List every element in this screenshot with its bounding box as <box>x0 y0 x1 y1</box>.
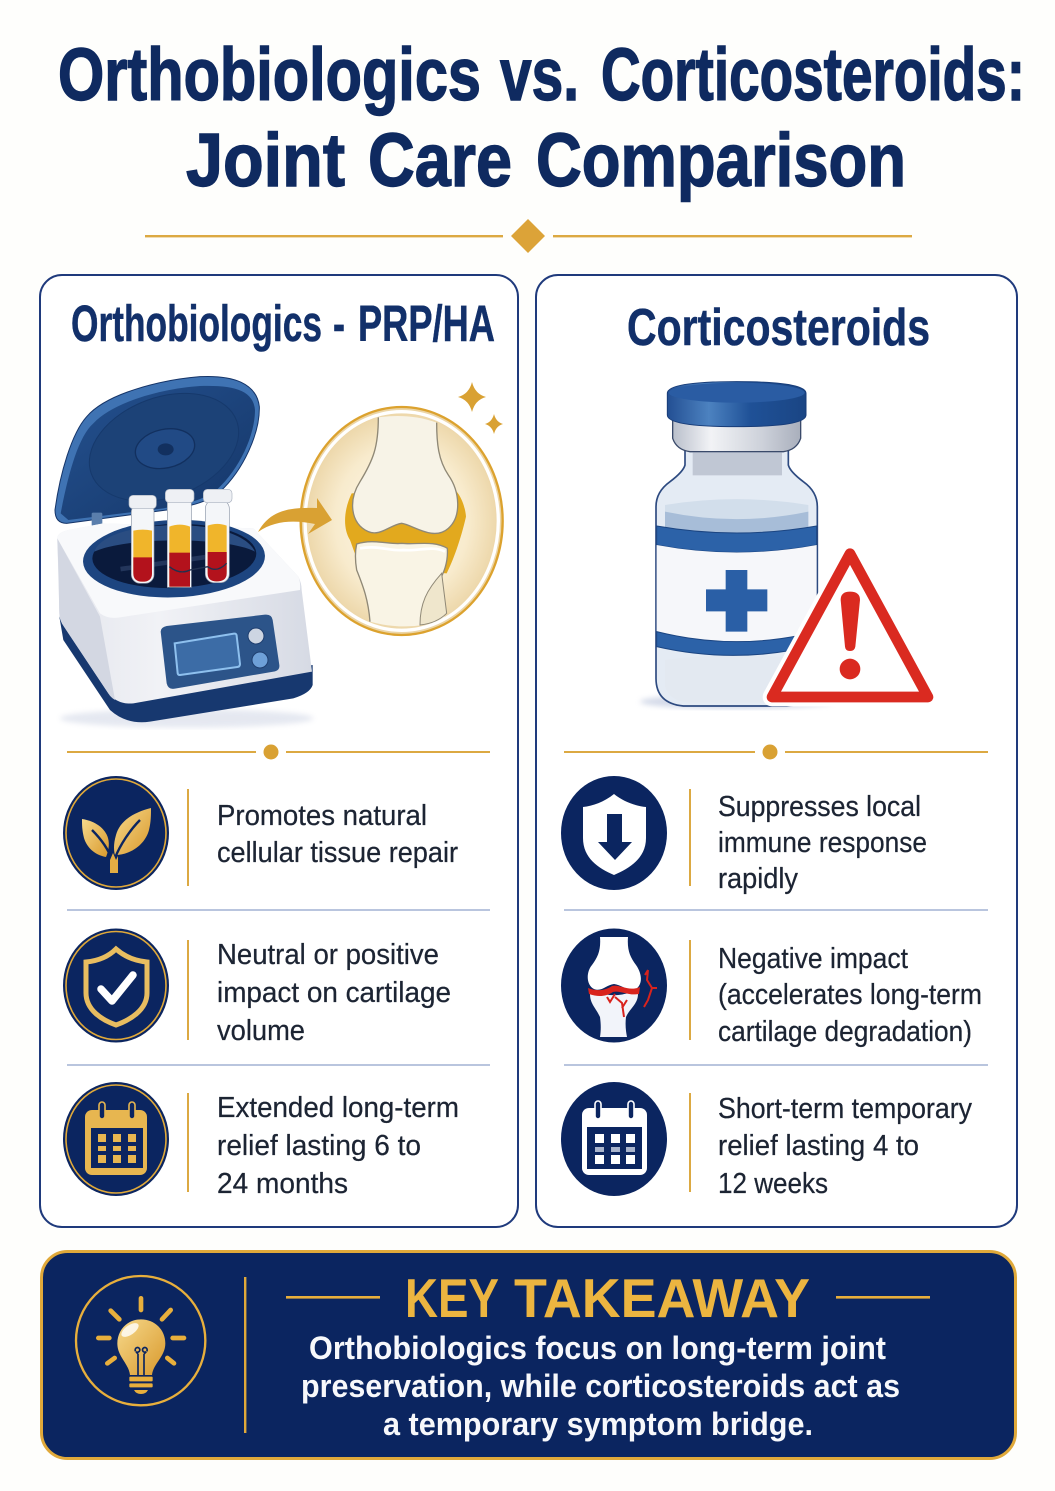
text: immune response: rapidly <box>718 863 798 895</box>
base band <box>59 617 313 722</box>
heading: key takeaway <box>286 1267 930 1329</box>
text: relief duration <box>217 1092 459 1200</box>
icon: gold calendar <box>63 1082 169 1196</box>
heading: corticosteroids: Corticosteroids <box>627 299 930 357</box>
title <box>58 33 1025 202</box>
femur <box>353 416 458 533</box>
illustration: centrifuge with tubes <box>55 374 313 728</box>
title: Joint <box>186 118 345 202</box>
tibia <box>355 542 447 626</box>
icon: white calendar <box>561 1082 667 1196</box>
text: short relief: relief lasting 4 to <box>718 1130 919 1162</box>
text: cellular repair: cellular tissue repair <box>217 837 458 869</box>
illustration: vial <box>640 382 833 709</box>
text: takeaway message <box>301 1330 900 1442</box>
rotor well <box>82 517 266 600</box>
separator <box>689 1093 691 1192</box>
sparkles <box>458 382 503 434</box>
icon: shield check <box>63 928 169 1042</box>
separator <box>689 789 691 886</box>
text: takeaway message: Orthobiologics focus on long-term joint <box>309 1330 886 1366</box>
text: cellular repair: Promotes natural <box>217 800 427 832</box>
text: cartilage degradation: (accelerates long-term <box>718 979 982 1011</box>
icon: shield down <box>561 776 667 890</box>
text: cartilage degradation: Negative impact <box>718 943 908 975</box>
icon: leaves <box>63 776 169 890</box>
tube 3 <box>203 489 232 583</box>
title: vs. <box>500 33 579 116</box>
separator <box>187 940 189 1040</box>
arrow: centrifuge to joint <box>258 498 332 534</box>
section divider <box>564 744 988 760</box>
text: short relief: Short-term temporary <box>718 1093 972 1125</box>
heading: orthobiologics: - <box>333 295 345 352</box>
heading: orthobiologics: PRP/HA <box>358 295 495 352</box>
icon: damaged knee <box>561 928 667 1042</box>
text: relief duration: relief lasting 6 to <box>217 1130 421 1162</box>
text: cartilage degradation <box>718 943 982 1048</box>
heading: orthobiologics: Orthobiologics <box>71 295 322 352</box>
text: cellular repair <box>217 800 458 869</box>
text: immune response: Suppresses local <box>718 791 921 823</box>
separator <box>244 1277 246 1433</box>
icon: warning triangle <box>772 554 928 697</box>
text: cartilage degradation: cartilage degradation) <box>718 1016 972 1048</box>
icon: knee joint medallion <box>301 407 503 635</box>
heading: key takeaway: TAKEAWAY <box>514 1267 810 1329</box>
separator <box>187 1093 189 1192</box>
text: takeaway message: preservation, while corticosteroids act as <box>301 1368 900 1404</box>
text: cartilage: volume <box>217 1015 305 1047</box>
lid <box>55 376 259 523</box>
text: relief duration: Extended long-term <box>217 1092 459 1124</box>
text: cartilage: impact on cartilage <box>217 977 451 1009</box>
control panel <box>161 615 279 689</box>
title divider with diamond <box>145 219 912 253</box>
separator <box>187 789 189 886</box>
housing <box>57 523 312 704</box>
separator <box>689 940 691 1040</box>
icon: light bulb <box>76 1276 205 1405</box>
text: short relief: 12 weeks <box>718 1168 828 1200</box>
panel: key takeaway <box>42 1252 1016 1458</box>
text: immune response: immune response <box>718 827 927 859</box>
text: cartilage: Neutral or positive <box>217 939 439 971</box>
tube 2 <box>165 489 194 587</box>
title: Comparison <box>536 118 906 202</box>
panel: orthobiologics <box>40 275 518 1227</box>
panel: corticosteroids <box>536 275 1017 1227</box>
text: takeaway message: a temporary symptom bridge. <box>383 1406 813 1442</box>
cartilage <box>345 488 466 573</box>
text: short relief <box>718 1093 972 1200</box>
tube 1 <box>129 495 156 583</box>
title: Orthobiologics <box>58 33 481 116</box>
text: relief duration: 24 months <box>217 1168 348 1200</box>
heading: key takeaway: KEY <box>405 1267 499 1329</box>
title: Care <box>368 118 512 202</box>
section divider <box>67 744 490 760</box>
text: immune response <box>718 791 927 895</box>
text: cartilage <box>217 939 451 1047</box>
